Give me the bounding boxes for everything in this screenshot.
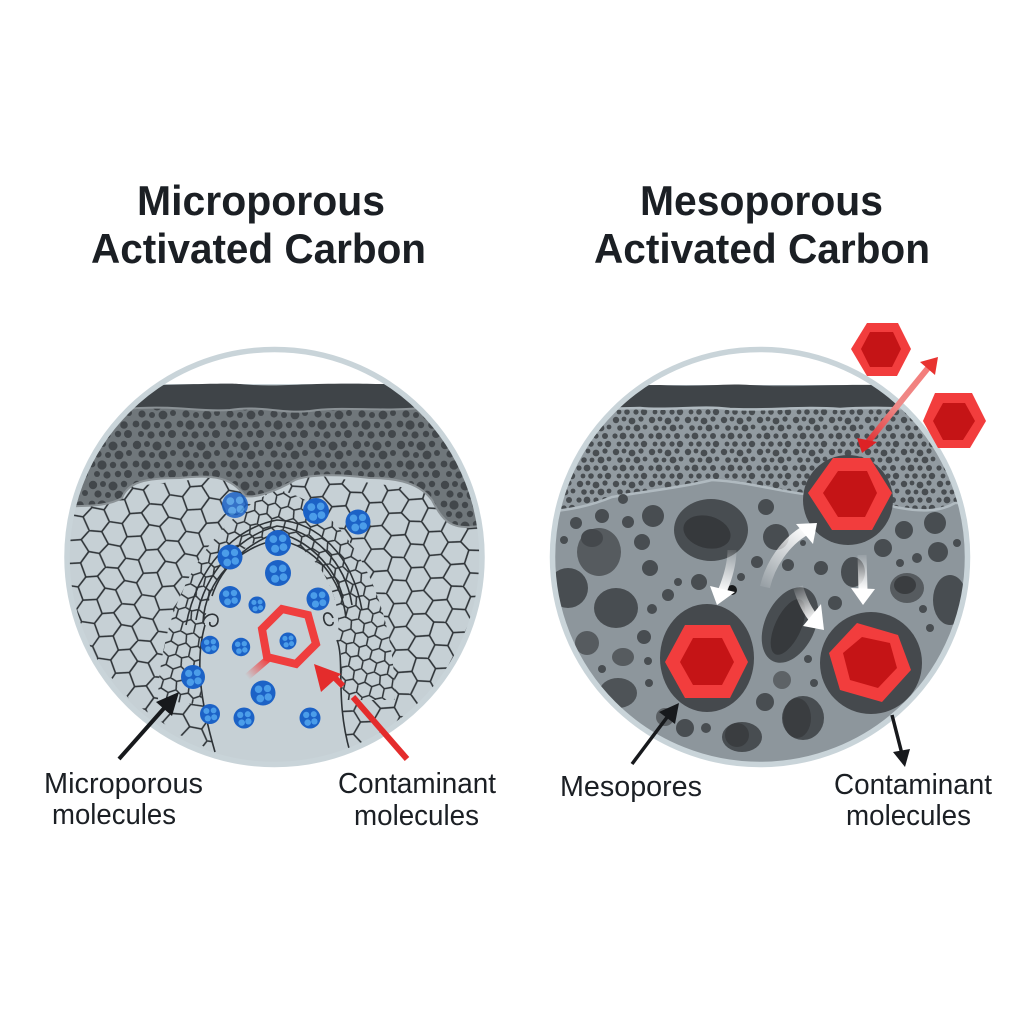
title: mesoporous activated carbon: Activated Carbon xyxy=(594,225,930,272)
title: microporous activated carbon xyxy=(91,177,426,272)
label: contaminant molecules right: Contaminant xyxy=(834,769,992,801)
arrow: white pore flow to lower left xyxy=(710,550,735,605)
label: contaminant molecules left: molecules xyxy=(354,800,479,832)
label: mesopores: Mesopores xyxy=(560,771,702,803)
mesopore field xyxy=(548,494,967,752)
arrow: white pore flow to lower right xyxy=(798,587,824,630)
icon: free contaminant hexagon top xyxy=(851,323,911,376)
label: microporous molecules xyxy=(44,768,203,831)
porous band xyxy=(545,408,975,512)
panel: microporous carbon circle xyxy=(64,346,485,768)
title: mesoporous activated carbon xyxy=(594,177,930,272)
circle outline xyxy=(552,350,968,764)
circular cross-section contents xyxy=(70,384,480,762)
arrow: black from circle to contaminant label xyxy=(892,715,910,767)
arrow: black to microporous molecules xyxy=(119,692,179,759)
arch of compressed pore walls xyxy=(186,520,362,752)
label: microporous molecules: molecules xyxy=(52,799,176,831)
label: contaminant molecules left xyxy=(338,768,496,832)
icon: red contaminant hexagon ring xyxy=(247,609,316,677)
icon: contaminant hexagon in lower left pore xyxy=(665,625,748,698)
arrow: black to mesopores xyxy=(632,703,679,764)
title: microporous activated carbon: Activated Carbon xyxy=(91,225,426,272)
label: contaminant molecules left: Contaminant xyxy=(338,768,496,800)
dark carbon surface layer xyxy=(620,384,896,408)
dark carbon surface layer xyxy=(134,384,414,411)
icon: contaminant hexagon in lower right pore xyxy=(829,623,911,702)
mesh: right carbon network xyxy=(288,476,480,743)
arrow: red to contaminant xyxy=(314,664,407,759)
circular cross-section contents xyxy=(555,384,965,762)
icon: free contaminant hexagon right xyxy=(923,393,986,448)
mesh: left carbon network xyxy=(70,478,267,746)
arrow: white pore flow downward xyxy=(851,555,875,605)
title: microporous activated carbon: Microporous xyxy=(137,177,385,224)
mesh: fine cells around the arch xyxy=(158,491,395,705)
arrow: red two-way diffusion xyxy=(857,357,938,453)
title: mesoporous activated carbon: Mesoporous xyxy=(640,177,883,224)
label: contaminant molecules right: molecules xyxy=(846,800,971,832)
icon: contaminant hexagon in upper pore xyxy=(808,458,892,530)
arrow: white pore flow to upper pore xyxy=(765,523,817,587)
pore holders for large contaminants xyxy=(660,455,922,714)
label: contaminant molecules right xyxy=(834,769,992,832)
label: microporous molecules: Microporous xyxy=(44,768,203,800)
porous band xyxy=(60,408,490,527)
blue microporous molecules xyxy=(181,492,370,728)
panel: mesoporous carbon circle xyxy=(545,323,986,780)
circle outline xyxy=(67,350,482,764)
